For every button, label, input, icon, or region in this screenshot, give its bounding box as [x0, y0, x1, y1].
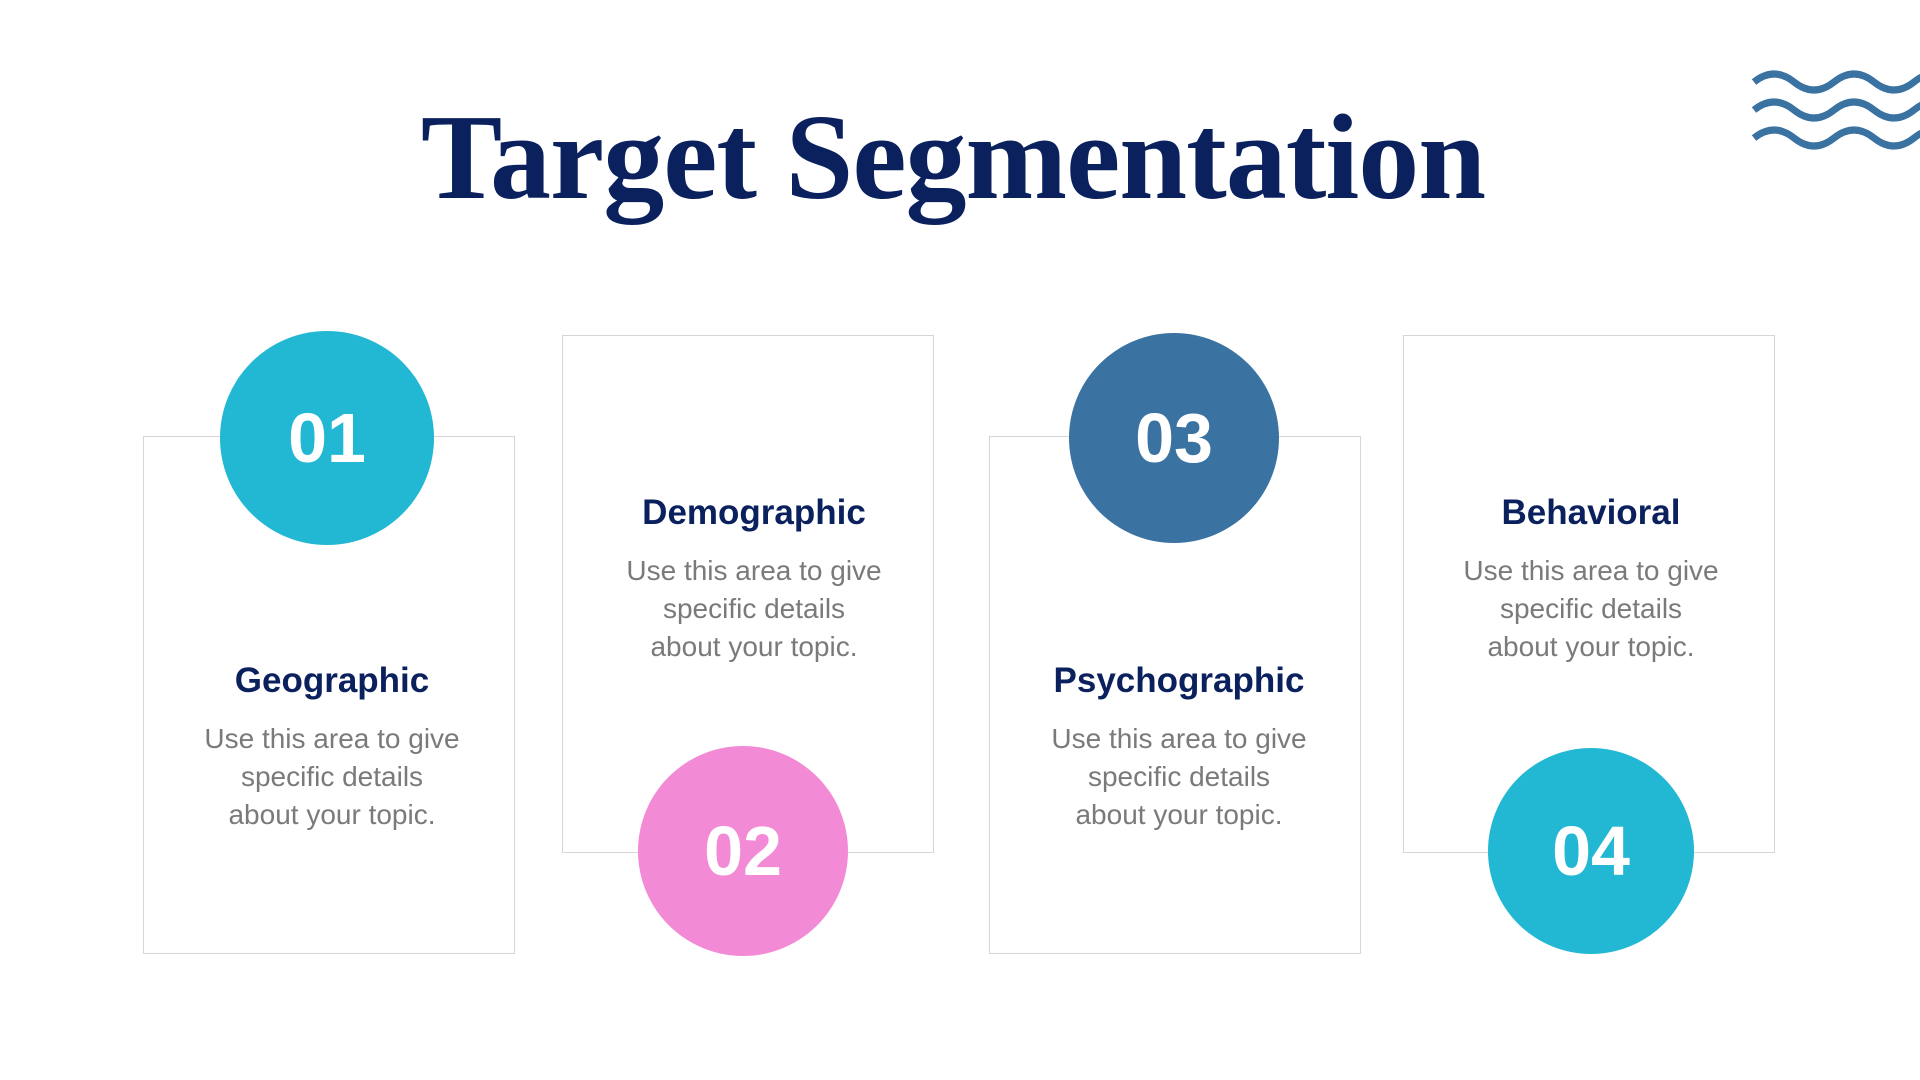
text: Geographic	[204, 661, 460, 830]
text: Psychographic: Psychographic	[1054, 661, 1304, 700]
icon: circle 01: 01	[288, 399, 366, 477]
text: Geographic: about your topic.	[228, 799, 436, 830]
text: Behavioral	[1463, 493, 1719, 662]
text: Demographic: Demographic	[642, 493, 866, 532]
text: Demographic: specific details	[663, 593, 845, 624]
text: Geographic: specific details	[241, 761, 423, 792]
icon: waves	[1752, 70, 1920, 150]
panel: card 1	[143, 436, 515, 954]
panel: card 2	[562, 335, 934, 853]
text: Psychographic	[1051, 661, 1307, 830]
icon: circle 01	[220, 331, 434, 545]
text: Behavioral: about your topic.	[1487, 631, 1695, 662]
text: Demographic: about your topic.	[650, 631, 858, 662]
text: Behavioral: specific details	[1500, 593, 1682, 624]
icon: circle 04: 04	[1552, 812, 1630, 890]
text: Psychographic: specific details	[1088, 761, 1270, 792]
text: Behavioral: Behavioral	[1502, 493, 1680, 532]
icon: circle 02	[638, 746, 848, 956]
text: Psychographic: Use this area to give	[1051, 723, 1307, 754]
icon: circle 03: 03	[1135, 399, 1213, 477]
icon: circle 03	[1069, 333, 1279, 543]
text: Demographic	[626, 493, 882, 662]
icon: circle 04	[1488, 748, 1694, 954]
text: Demographic: Use this area to give	[626, 555, 882, 586]
text: Psychographic: about your topic.	[1075, 799, 1283, 830]
text: Geographic: Use this area to give	[204, 723, 460, 754]
panel: card 4	[1403, 335, 1775, 853]
text: Geographic: Geographic	[235, 661, 429, 700]
title: Target Segmentation	[421, 90, 1485, 225]
text: Behavioral: Use this area to give	[1463, 555, 1719, 586]
icon: circle 02: 02	[704, 812, 782, 890]
panel: card 3	[989, 436, 1361, 954]
